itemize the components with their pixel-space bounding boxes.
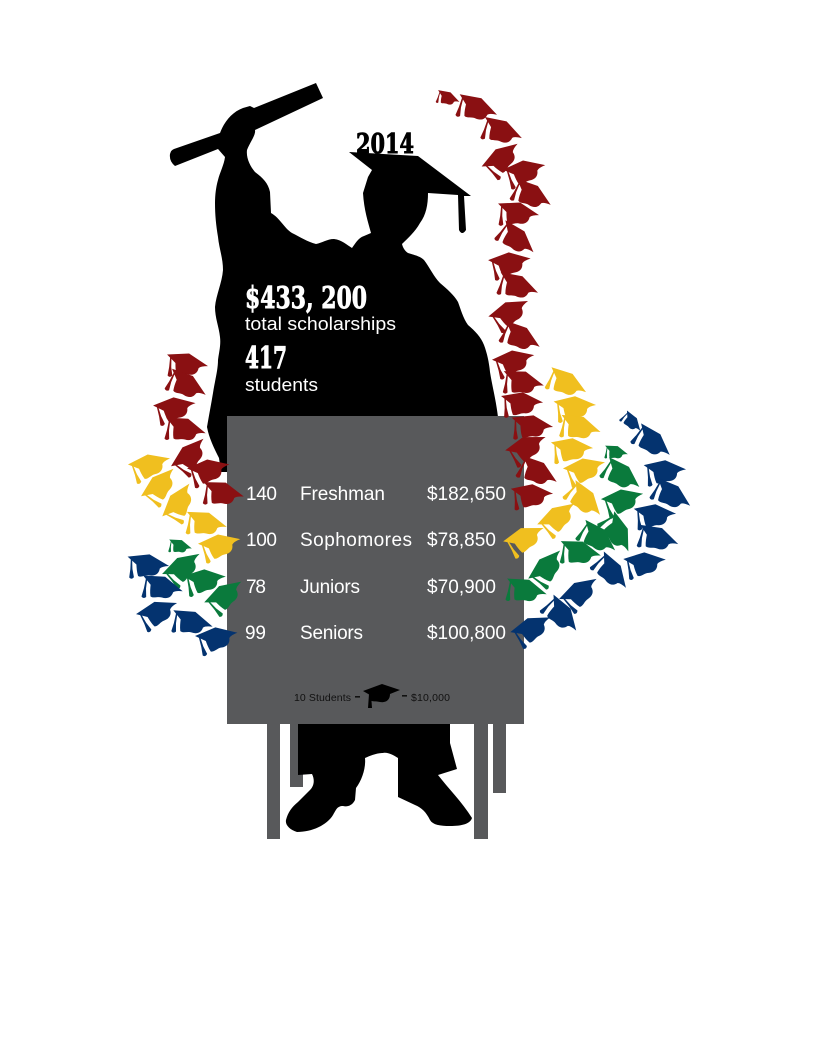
- graduate silhouette: [170, 83, 498, 832]
- green caps, right: [505, 445, 647, 605]
- green caps, left: [161, 539, 249, 618]
- sophomores row: $78,850: [427, 530, 496, 551]
- total scholarships amount: $433, 200: [245, 281, 367, 316]
- blue caps, right: [510, 410, 695, 650]
- yellow caps, left: [128, 447, 244, 564]
- juniors row: 78: [246, 577, 266, 598]
- legend: $10,000: [411, 692, 450, 704]
- seniors row: Seniors: [300, 623, 363, 644]
- total scholarships label: total scholarships: [245, 313, 396, 334]
- table back leg left: [290, 700, 303, 787]
- seniors row: [245, 623, 506, 644]
- seniors row: $100,800: [427, 623, 506, 644]
- students label: students: [245, 374, 318, 395]
- student count: 417: [245, 341, 287, 376]
- seniors row: 99: [245, 623, 266, 644]
- table front leg right: [474, 724, 488, 839]
- freshman row: [246, 484, 506, 505]
- year label: 2014: [356, 129, 414, 160]
- juniors row: [246, 577, 496, 598]
- sophomores row: 100: [246, 530, 277, 551]
- maroon caps, left: [153, 354, 245, 507]
- juniors row: Juniors: [300, 577, 360, 598]
- table front leg left: [267, 724, 280, 839]
- legend: [294, 684, 450, 708]
- freshman row: Freshman: [300, 484, 385, 505]
- yellow caps, right: [503, 366, 609, 560]
- sophomores row: [246, 530, 496, 551]
- freshman row: 140: [246, 484, 277, 505]
- legend: 10 Students: [294, 692, 351, 704]
- blue caps, left: [128, 553, 241, 657]
- juniors row: $70,900: [427, 577, 496, 598]
- sophomores row: Sophomores: [300, 530, 412, 551]
- maroon caps arc, top right: [435, 90, 561, 511]
- table panel: [227, 416, 524, 724]
- table back leg right: [493, 700, 506, 793]
- freshman row: $182,650: [427, 484, 506, 505]
